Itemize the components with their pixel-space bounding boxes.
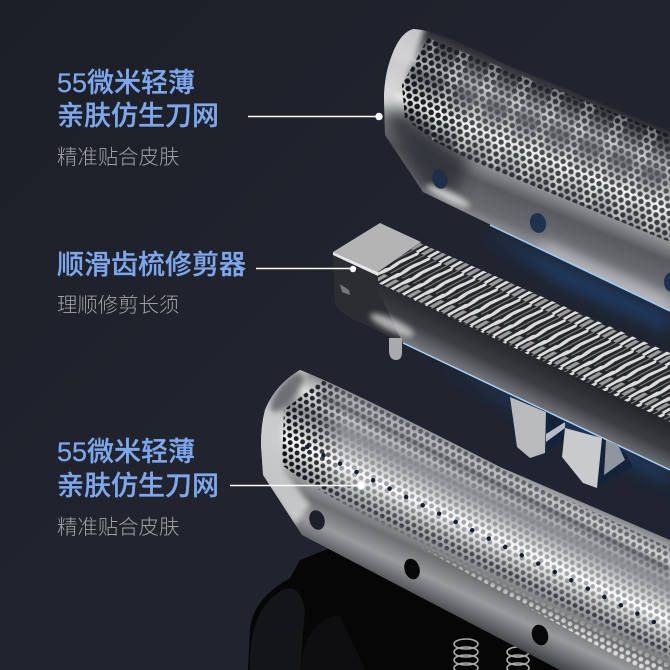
callout: foil bottom: 55微米轻薄 bbox=[57, 437, 195, 467]
left cap shading bbox=[384, 29, 428, 108]
callout: foil bottom: 亲肤仿生刀网 bbox=[57, 471, 219, 501]
small slot bbox=[340, 284, 350, 295]
callout: foil bottom bbox=[57, 437, 365, 539]
dark ridge bbox=[320, 396, 670, 570]
callout: foil bottom: 精准贴合皮肤 bbox=[57, 516, 179, 539]
callout: foil top: 亲肤仿生刀网 bbox=[57, 101, 219, 131]
comb trimmer plate bbox=[333, 223, 670, 470]
glow edge of top foil bbox=[490, 225, 670, 311]
guide tabs bbox=[510, 397, 633, 488]
mounting holes bbox=[309, 510, 325, 530]
icon: springs bbox=[454, 639, 529, 670]
mounting holes bbox=[432, 169, 448, 189]
comb top plate bbox=[333, 223, 421, 272]
row of dark holes bbox=[307, 447, 654, 622]
blue glow under top foil bbox=[480, 228, 670, 332]
edge highlight bbox=[540, 245, 670, 306]
top shaver foil bbox=[378, 20, 670, 320]
callout: comb trimmer: 顺滑齿梳修剪器 bbox=[57, 250, 246, 280]
callout: comb trimmer bbox=[57, 250, 356, 317]
bottom shaver foil bbox=[255, 365, 670, 670]
left cap shading bbox=[261, 370, 312, 526]
shaver head base bbox=[248, 548, 580, 670]
heading: 55微米轻薄 bbox=[57, 68, 195, 98]
callout: foil top bbox=[57, 68, 383, 169]
comb teeth bbox=[378, 243, 670, 422]
pin bbox=[389, 338, 402, 360]
callout: foil top: 精准贴合皮肤 bbox=[57, 146, 179, 169]
blue glow under comb plate bbox=[440, 360, 670, 484]
callout: comb trimmer: 理顺修剪长须 bbox=[57, 294, 179, 317]
